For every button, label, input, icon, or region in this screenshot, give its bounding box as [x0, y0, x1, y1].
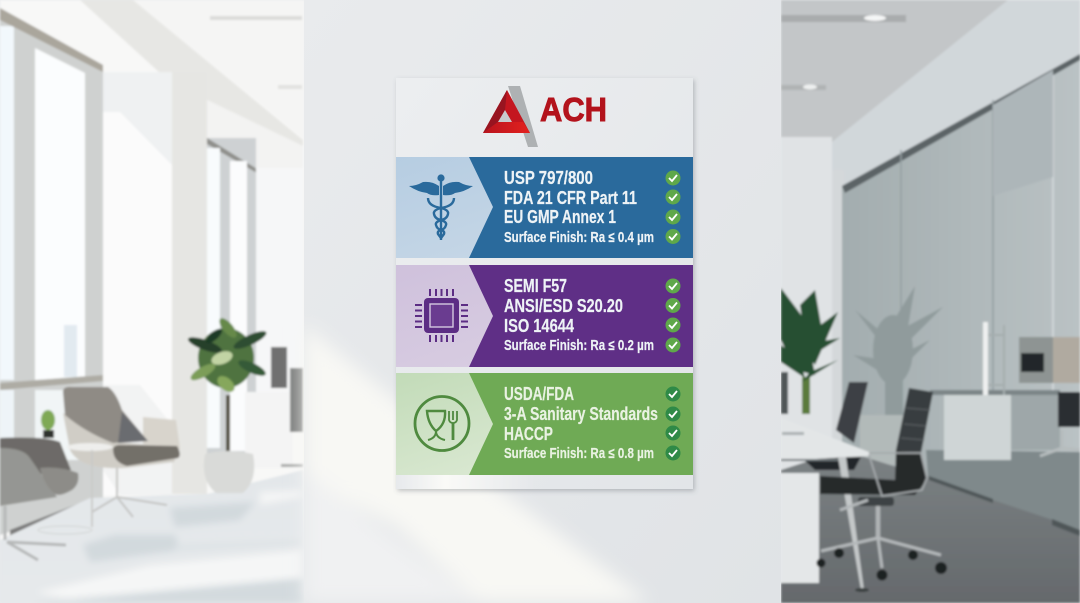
reflected desk and monitor	[1011, 337, 1080, 456]
standards list: ANSI/ESD S20.20	[504, 295, 623, 316]
ceiling	[133, 0, 305, 140]
far desk and monitor	[245, 347, 303, 468]
reflected cabinet	[944, 395, 1011, 460]
standards list: ISO 14644	[504, 315, 575, 336]
green plant	[781, 288, 840, 414]
band: pharmaceutical	[396, 157, 693, 258]
standards list: USDA/FDA	[504, 383, 574, 404]
ceiling	[781, 0, 1008, 142]
office chair	[816, 388, 947, 580]
door handle	[983, 322, 1004, 395]
small potted plant on sill	[41, 410, 55, 438]
sign background panel	[396, 78, 693, 489]
standards list	[504, 167, 654, 246]
standards list: USP 797/800	[504, 167, 593, 188]
check icons	[666, 278, 680, 352]
check icons	[666, 170, 680, 244]
walls and pillar	[103, 72, 172, 495]
pot	[204, 451, 254, 493]
sign board	[396, 78, 693, 489]
standards list	[504, 383, 658, 462]
standards list: Surface Finish: Ra ≤ 0.8 µm	[504, 446, 654, 462]
floor plant	[186, 316, 268, 493]
standards list: EU GMP Annex 1	[504, 206, 616, 227]
standards list: Surface Finish: Ra ≤ 0.4 µm	[504, 230, 654, 246]
conference table	[781, 418, 869, 592]
band: food and beverage	[396, 373, 693, 475]
standards list: Surface Finish: Ra ≤ 0.2 µm	[504, 338, 654, 354]
band: semiconductor	[396, 265, 693, 367]
large window	[0, 8, 103, 537]
floor	[781, 450, 1080, 603]
ACH logo	[483, 86, 607, 147]
office background, left side	[0, 0, 305, 603]
glass partition	[842, 54, 1080, 533]
soffit	[832, 0, 1080, 190]
icon: glass and fork	[415, 396, 469, 450]
reflected plant	[853, 286, 943, 465]
lounge chair, left	[0, 438, 78, 560]
standards list: SEMI F57	[504, 275, 567, 296]
back wall	[781, 137, 832, 477]
standards list: FDA 21 CFR Part 11	[504, 187, 637, 208]
distant windows	[207, 138, 257, 456]
floor	[0, 470, 305, 603]
white wall with sunlight	[304, 0, 781, 603]
standards list: 3-A Sanitary Standards	[504, 403, 658, 424]
standards list: HACCP	[504, 423, 553, 444]
back chair	[781, 372, 868, 470]
icon: microchip	[415, 289, 468, 342]
ACH logo: ACH	[540, 91, 607, 128]
check icons	[666, 386, 680, 460]
floor light and shadow streaks	[30, 490, 303, 603]
standards list	[504, 275, 654, 354]
icon: caduceus	[409, 174, 473, 240]
office background, right side	[781, 0, 1080, 603]
lounge chair, right	[63, 387, 180, 517]
side table	[38, 443, 113, 534]
